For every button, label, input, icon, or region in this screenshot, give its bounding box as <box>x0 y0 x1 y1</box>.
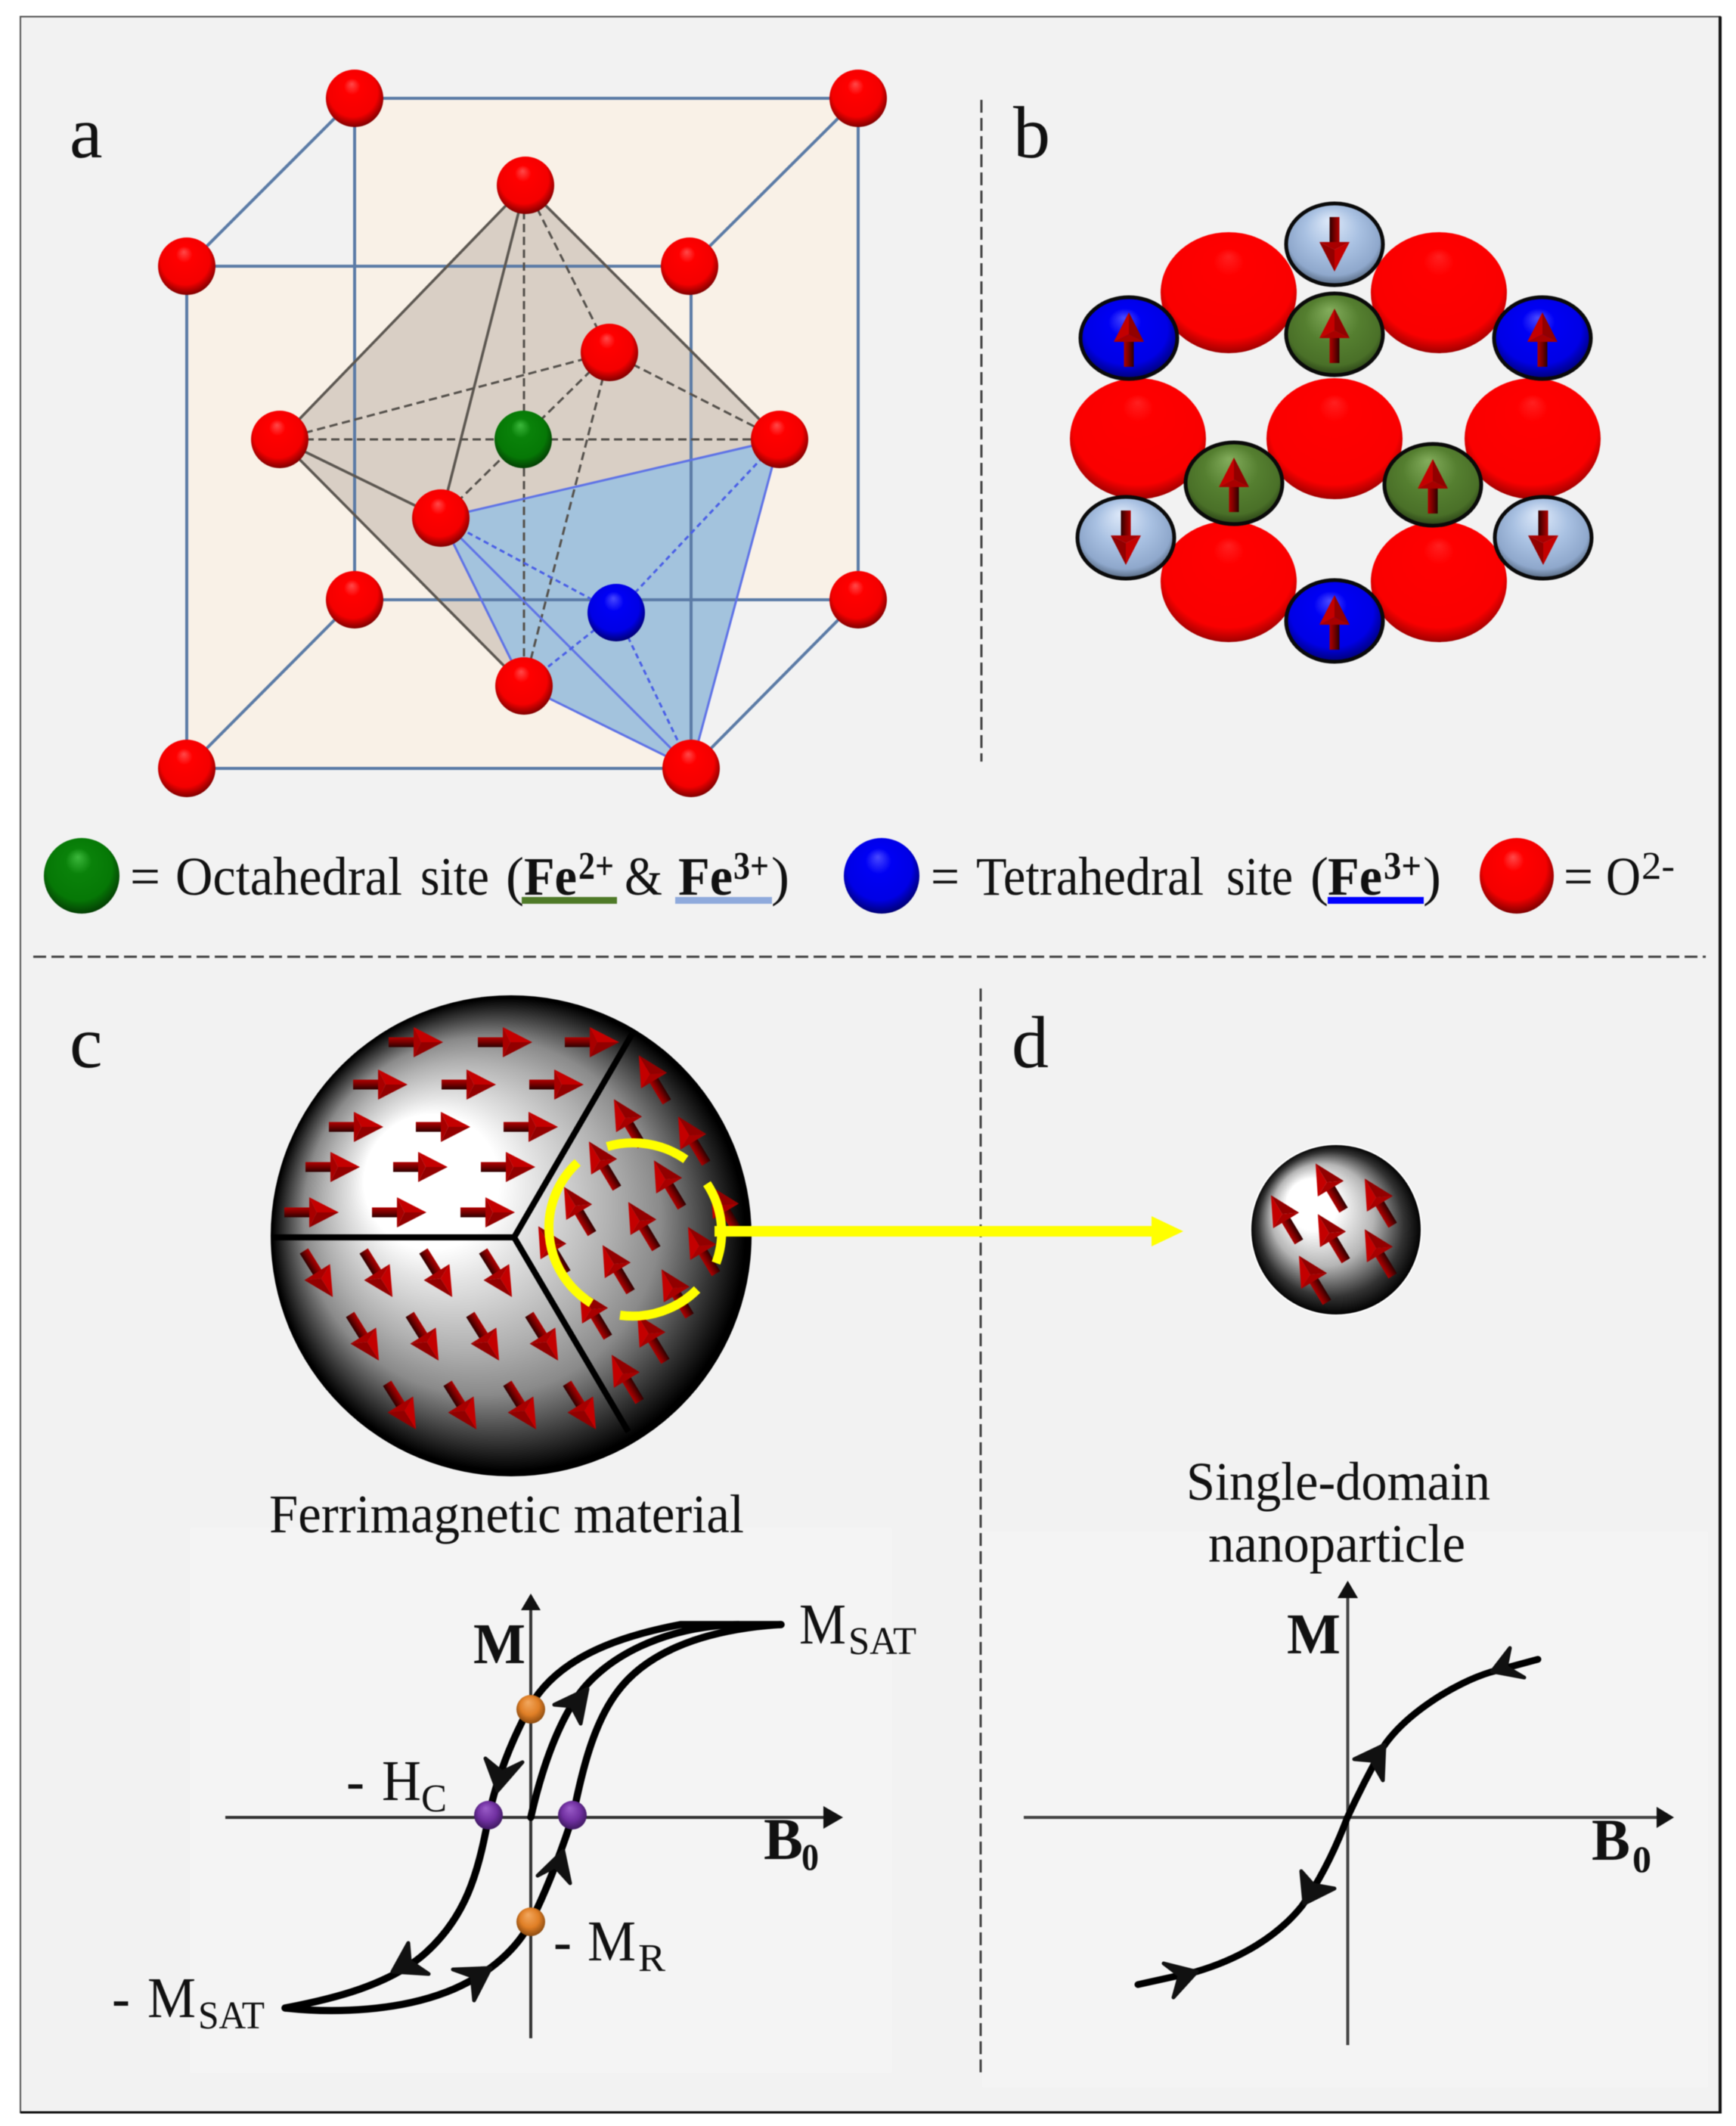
domain walls <box>271 1034 632 1432</box>
panel a: crystal lattice <box>70 70 887 797</box>
legend text: tetrahedral: Fe <box>1328 846 1382 907</box>
oxygen ions <box>1070 232 1601 642</box>
legend text: octahedral: ) <box>771 846 789 907</box>
spin arrows <box>1111 217 1558 650</box>
label MSAT <box>799 1593 916 1663</box>
vertical divider bottom <box>980 989 981 2078</box>
axis label M: M <box>473 1612 525 1676</box>
legend icon: tetrahedral <box>844 838 919 914</box>
legend text: octahedral: site <box>420 846 489 907</box>
magnetization curve <box>1138 1659 1538 1985</box>
axis label B0 <box>1592 1807 1651 1880</box>
frame bottom edge <box>20 2112 1722 2113</box>
vertical divider top <box>980 100 983 762</box>
legend text: oxygen <box>1564 845 1675 907</box>
heading a: a <box>70 92 103 174</box>
legend text: tetrahedral: Tetrahedral <box>976 846 1204 907</box>
underline tetrahedral Fe3+ <box>1328 897 1424 904</box>
legend text: tetrahedral: site <box>1226 846 1293 907</box>
hysteresis chart d <box>1024 1581 1674 2045</box>
heading b: b <box>1013 92 1050 174</box>
label MSAT: SAT <box>848 1620 916 1663</box>
arrow: yellow link from c to d <box>715 1216 1183 1246</box>
legend text: oxygen: = <box>1564 846 1593 907</box>
domain 3 arrows <box>525 1047 752 1409</box>
cube faces <box>187 98 858 768</box>
caption: nanoparticle <box>1208 1513 1465 1574</box>
tetrahedral site atom <box>587 584 645 641</box>
label -HC <box>346 1749 447 1820</box>
label -MR: - <box>553 1910 572 1973</box>
panel b: spin arrangement <box>1013 92 1601 662</box>
legend text: octahedral: = <box>130 846 160 907</box>
axis label M: M <box>1287 1603 1341 1666</box>
green octahedral ions <box>1186 293 1481 526</box>
octahedron solid edges <box>280 185 780 686</box>
underline Fe2+ <box>522 897 617 904</box>
legend icon: oxygen <box>1480 838 1554 914</box>
legend text: tetrahedral: ) <box>1423 846 1441 907</box>
direction arrowheads <box>1164 1648 1524 1997</box>
caption <box>1186 1451 1490 1574</box>
underline Fe3+ <box>675 897 772 904</box>
light blue octahedral ions <box>1077 203 1592 579</box>
axis label B0: 0 <box>801 1836 819 1878</box>
axis label B0 <box>764 1806 819 1878</box>
legend icon: octahedral <box>44 838 119 914</box>
legend text: octahedral: 3+ <box>733 845 769 888</box>
legend text: octahedral: Octahedral <box>175 846 402 907</box>
label -HC: - <box>346 1749 364 1813</box>
heading d: d <box>1012 1002 1049 1084</box>
legend text: octahedral: ( <box>506 846 524 907</box>
horizontal divider <box>33 956 1706 957</box>
legend text: octahedral: Fe <box>524 846 577 907</box>
domain 1 arrows <box>284 1027 619 1227</box>
legend text: tetrahedral: = <box>931 846 959 907</box>
label -MR <box>553 1910 665 1980</box>
blue tetrahedral ions <box>1080 297 1591 662</box>
axes <box>1024 1581 1674 2045</box>
legend <box>44 838 1675 914</box>
heading c: c <box>70 1002 103 1084</box>
label -MSAT: - <box>112 1966 130 2030</box>
label -MSAT: M <box>147 1966 196 2030</box>
legend text: octahedral: Fe <box>678 846 733 907</box>
axis label B0: 0 <box>1632 1838 1651 1880</box>
caption: Ferrimagnetic material <box>269 1484 744 1544</box>
octahedron face <box>280 185 780 686</box>
legend text: octahedral <box>130 845 789 907</box>
legend text: oxygen: 2- <box>1641 845 1675 888</box>
oxygen atoms <box>158 70 887 797</box>
legend text: oxygen: O <box>1606 846 1641 907</box>
label -MSAT: SAT <box>198 1994 265 2038</box>
tetrahedron face <box>441 439 780 768</box>
lighter background of hysteresis plot d <box>982 1532 1708 2087</box>
caption: Single-domain <box>1186 1451 1490 1512</box>
octahedral site atom <box>494 411 552 468</box>
label -HC: H <box>382 1749 421 1813</box>
octahedron dashed edges <box>280 185 780 686</box>
legend text: tetrahedral <box>931 845 1441 907</box>
hysteresis chart c <box>112 1593 916 2038</box>
cube edges <box>187 98 858 768</box>
small sphere <box>1251 1144 1421 1315</box>
panel c: multi-domain particle <box>70 995 752 1544</box>
legend text: tetrahedral: 3+ <box>1384 845 1421 888</box>
panel d: single-domain particle <box>1012 1002 1490 1574</box>
coercivity points <box>474 1801 587 1830</box>
legend text: octahedral: & <box>625 846 662 907</box>
yellow dashed circle <box>549 1143 721 1316</box>
legend text: octahedral: 2+ <box>578 845 614 888</box>
label -HC: C <box>421 1777 447 1820</box>
label -MR: M <box>587 1910 636 1973</box>
axes <box>225 1594 843 2038</box>
lighter background of hysteresis plot c <box>190 1528 892 2073</box>
sphere <box>271 995 752 1476</box>
axis label B0: B <box>764 1806 803 1872</box>
remanence points <box>516 1695 545 1936</box>
domain 2 arrows <box>291 1243 609 1438</box>
hysteresis loop <box>285 1625 781 2010</box>
label -MR: R <box>638 1937 665 1980</box>
frame right edge <box>1719 17 1722 2113</box>
small sphere arrows <box>1258 1156 1406 1310</box>
label MSAT: M <box>799 1593 846 1656</box>
axis label B0: B <box>1592 1807 1630 1873</box>
direction arrowheads <box>392 1689 587 2000</box>
tetrahedron dashed edges <box>441 439 780 768</box>
label -MSAT <box>112 1966 265 2038</box>
tetrahedron solid edges <box>441 439 780 768</box>
legend text: tetrahedral: ( <box>1310 846 1328 907</box>
